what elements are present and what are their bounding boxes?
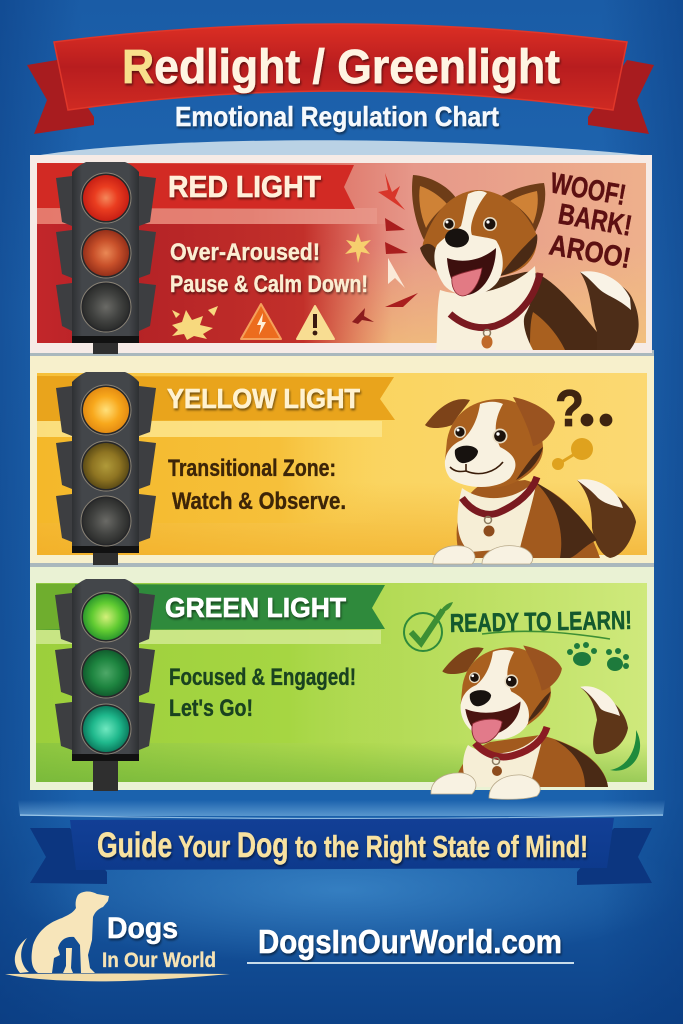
collar	[462, 477, 537, 514]
icon: cream warning	[297, 306, 334, 339]
green header band	[36, 584, 385, 630]
text: transitional zone: Transitional Zone:	[168, 455, 336, 482]
traffic light: yellow	[56, 372, 156, 565]
tag	[492, 758, 502, 776]
text: over-aroused	[170, 239, 368, 298]
ears	[412, 175, 456, 240]
tail	[575, 272, 639, 350]
yellow header band	[37, 376, 395, 421]
logo tagline: In Our World	[102, 949, 216, 972]
dog: green panel	[431, 645, 628, 799]
text: woof bark aroo: BARK!	[556, 198, 634, 243]
main ribbon	[54, 24, 627, 110]
icon: question and dots	[555, 380, 612, 438]
paws	[431, 773, 540, 799]
chest	[436, 266, 536, 350]
text: over-aroused: Pause & Calm Down!	[170, 271, 368, 298]
icon: burst	[172, 306, 218, 340]
tag	[482, 330, 492, 348]
logo tail	[15, 938, 29, 973]
mouth	[447, 248, 496, 295]
traffic light: green	[55, 579, 155, 791]
collar	[450, 273, 540, 328]
heading: green light: GREEN LIGHT	[165, 592, 346, 623]
icon: paw prints	[567, 642, 629, 671]
body	[455, 735, 608, 787]
text: transitional zone: Watch & Observe.	[172, 488, 346, 515]
icon: connected circles	[552, 438, 593, 470]
right tail	[577, 828, 652, 885]
red header band	[37, 163, 355, 209]
icon: check circle	[404, 602, 453, 651]
body	[437, 272, 597, 350]
collar	[475, 727, 547, 757]
icon: shards	[352, 173, 418, 324]
website: DogsInOurWorld.com	[258, 923, 562, 960]
panel: yellow light	[30, 356, 654, 563]
footer text: Guide Your Dog to the Right State of Mind!	[97, 826, 588, 865]
right ribbon tail	[588, 60, 654, 134]
footer rule	[20, 815, 663, 818]
dog: yellow panel	[425, 397, 636, 564]
heading: red light: RED LIGHT	[168, 169, 321, 204]
icon: yellow spark	[345, 233, 371, 263]
panel: red light	[30, 155, 652, 353]
head	[425, 397, 555, 488]
logo	[5, 892, 230, 981]
text: focused and engaged: Focused & Engaged!	[169, 664, 356, 691]
left tail	[30, 828, 107, 884]
tail	[577, 480, 636, 558]
logo swoosh	[5, 974, 230, 981]
text: over-aroused: Over-Aroused!	[170, 239, 320, 266]
paws	[433, 546, 533, 564]
text: focused and engaged	[169, 664, 356, 722]
left ribbon tail	[27, 60, 94, 134]
icon: orange warning	[241, 304, 281, 339]
body	[457, 480, 600, 558]
icon: underline	[482, 631, 610, 639]
head	[442, 645, 562, 743]
head	[420, 190, 537, 296]
text: woof bark aroo: AROO!	[547, 229, 633, 275]
text: woof bark aroo	[547, 167, 634, 275]
tongue	[452, 268, 482, 296]
logo name: Dogs	[107, 912, 178, 945]
text: ready to learn: READY TO LEARN!	[450, 605, 632, 638]
main band	[70, 818, 614, 870]
eyes	[443, 218, 455, 230]
heading: yellow light: YELLOW LIGHT	[167, 383, 360, 414]
logo foreleg	[63, 948, 73, 973]
tail	[580, 687, 628, 754]
icon: swoosh	[610, 730, 640, 771]
icon: question and dots: ?	[555, 380, 584, 438]
text: transitional zone	[168, 455, 346, 515]
title text: Redlight / Greenlight	[122, 41, 560, 94]
footer ribbon	[30, 818, 652, 885]
subtitle: Emotional Regulation Chart	[175, 101, 499, 132]
nose	[445, 228, 469, 248]
chest	[463, 728, 545, 787]
tag	[484, 516, 494, 536]
text: woof bark aroo: WOOF!	[548, 167, 628, 212]
text: focused and engaged: Let's Go!	[169, 695, 253, 722]
title ribbon	[27, 24, 654, 134]
panel: green light	[30, 567, 654, 790]
logo dog silhouette	[32, 892, 109, 973]
chest	[457, 478, 537, 552]
dog: red panel	[412, 175, 639, 350]
traffic light: red	[56, 162, 156, 354]
